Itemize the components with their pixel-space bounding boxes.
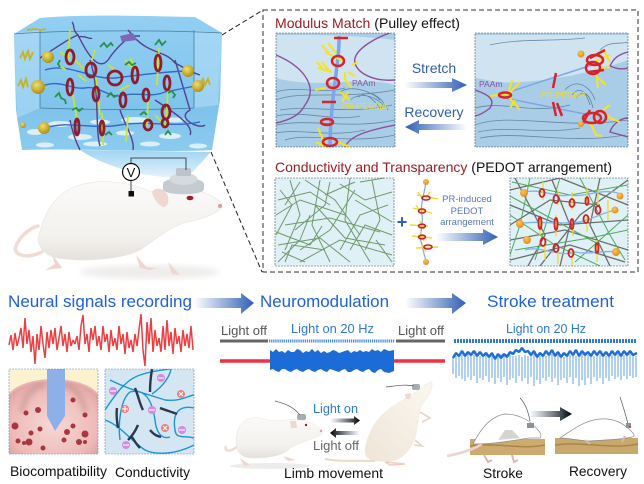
heading: stroke treatment: Stroke treatment	[487, 292, 614, 311]
stroke rat paws	[484, 455, 518, 462]
projection cone	[80, 150, 211, 178]
neuromodulation signal trace	[220, 349, 445, 373]
cube floor bubbles	[27, 117, 207, 148]
label: light on 20 Hz stroke: Light on 20 Hz	[506, 321, 586, 336]
voltmeter symbol	[122, 164, 140, 180]
label: stroke: Stroke	[483, 465, 523, 481]
arrow: black right	[330, 416, 360, 425]
image: PEDOT fibres random	[275, 178, 394, 266]
image: relaxed pulley	[276, 33, 395, 147]
light timing bars	[220, 340, 445, 342]
dashed detail panel	[263, 10, 638, 272]
label PR-PEGMA left: PR-PEGMA	[342, 101, 388, 111]
panel: conductivity	[105, 369, 194, 454]
label: light off right: Light off	[398, 323, 444, 338]
red rings	[321, 38, 348, 146]
label PR-PEGMA right: PR-PEGMA	[541, 90, 587, 100]
tail	[15, 226, 42, 256]
feet	[45, 255, 187, 276]
red rings	[499, 50, 606, 125]
hydrogel cube illustration	[14, 16, 222, 178]
wiring	[131, 158, 186, 192]
arrow: stroke to recovery	[530, 407, 572, 421]
label: light on: Light on	[313, 401, 358, 416]
arrow: recovery: Recovery	[404, 104, 464, 120]
electrode cap	[163, 178, 204, 194]
electrode contact	[128, 191, 134, 196]
voltmeter symbol: V	[127, 165, 136, 180]
label: light off: Light off	[313, 438, 359, 453]
label: PR-induced PEDOT arrangement: PEDOT	[451, 206, 484, 217]
arrow: recovery	[404, 104, 467, 134]
heading: neuromodulation: Neuromodulation	[260, 292, 389, 311]
main white rat with electrode	[15, 158, 222, 279]
arrow: to neuromodulation	[194, 293, 254, 314]
recovery rat implant	[620, 397, 628, 424]
label: limb movement: Limb movement	[284, 465, 383, 481]
yellow branches	[315, 43, 358, 147]
yellow-green branches	[58, 30, 168, 145]
blue polymer chains	[40, 68, 200, 128]
label PAAm left: PAAm	[352, 78, 375, 88]
stroke signal trace	[453, 348, 637, 386]
arrow: to stroke treatment	[405, 293, 466, 314]
label: recovery: Recovery	[569, 463, 627, 479]
cube side yellow strands	[18, 29, 210, 87]
cube back wall edges	[14, 30, 222, 110]
image: arranged PEDOT	[510, 178, 628, 266]
purple polymer chains	[40, 22, 205, 150]
image: stretched pulley	[475, 33, 628, 147]
arrow: stretch	[404, 60, 467, 92]
rat: rearing	[325, 382, 432, 465]
red neural signal trace	[9, 314, 193, 366]
label: PR-induced PEDOT arrangement: PR-induced	[442, 194, 492, 205]
cube body	[14, 16, 222, 151]
tail stroke rat	[447, 444, 482, 456]
ground shadow	[80, 265, 220, 279]
arrow: black left	[330, 428, 360, 438]
stroke rat implant	[520, 398, 530, 421]
stroke rat body	[473, 414, 541, 444]
label: PR-induced PEDOT arrangement: arrangement	[440, 217, 494, 228]
polyrotaxane chain	[410, 179, 438, 265]
nose	[218, 204, 222, 208]
ledge right	[555, 438, 638, 454]
relaxed hydrogel texture	[276, 35, 395, 85]
stroke stimulation bar	[454, 339, 637, 343]
heading: conductivity and transparency: Conductivity and Transparency (PEDOT arrangement)	[275, 159, 612, 175]
cells	[12, 398, 88, 450]
stroke scene	[447, 397, 638, 462]
gold spheres	[20, 51, 204, 134]
recovery rat body	[560, 419, 634, 441]
stretched hydrogel texture	[475, 35, 628, 83]
axle	[330, 36, 339, 147]
label: conductivity: Conductivity	[115, 464, 190, 480]
label: light off left: Light off	[221, 323, 267, 338]
rat: light off	[226, 401, 322, 469]
eye	[186, 196, 194, 200]
yellow branches	[490, 51, 620, 136]
label: light on 20 Hz: Light on 20 Hz	[291, 321, 374, 336]
plus sign: +	[397, 212, 407, 232]
red rings	[66, 50, 170, 135]
arrow: arrangement	[436, 229, 498, 245]
green squiggles	[55, 40, 175, 135]
zoom connector dashed lines	[211, 10, 263, 272]
probe	[47, 369, 65, 431]
label: biocompatibility: Biocompatibility	[10, 463, 107, 479]
arrow: stretch: Stretch	[412, 60, 456, 76]
purple tag	[120, 33, 137, 42]
panel: biocompatibility	[9, 369, 98, 454]
heading: neural signals recording: Neural signals recording	[8, 292, 192, 311]
label PAAm right: PAAm	[479, 79, 502, 89]
heading: modulus match: Modulus Match (Pulley effect)	[275, 15, 460, 31]
ear	[152, 189, 168, 207]
ledge left	[470, 439, 545, 455]
cube side wall highlights	[14, 30, 222, 118]
body	[38, 182, 222, 260]
